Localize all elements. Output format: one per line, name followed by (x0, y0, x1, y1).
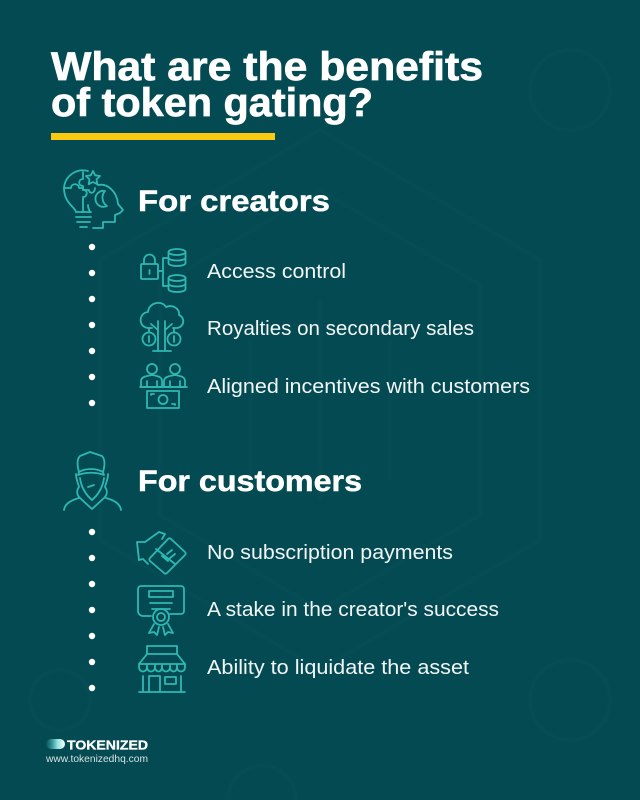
text: no subscription: No subscription payments (207, 542, 453, 564)
text: aligned incentives: Aligned incentives with customers (207, 376, 530, 398)
icon: person with cap (64, 452, 121, 510)
heading: for creators: For creators (138, 185, 330, 218)
icon: certificate (138, 586, 184, 635)
footer url: www.tokenizedhq.com (45, 753, 148, 765)
logo wordmark: TOKENIZED (67, 738, 148, 752)
icon: lightbulb puzzle head (64, 170, 123, 228)
footer logo (46, 738, 148, 752)
logo mark (46, 739, 65, 749)
panel: for customers (64, 452, 499, 692)
text: ability to liquidate: Ability to liquidate the asset (207, 657, 469, 679)
title: of token gating? (51, 81, 373, 125)
icon: lock and databases (141, 249, 186, 292)
panel: for creators (64, 170, 530, 408)
title (51, 45, 483, 125)
icon: money tree cloud (141, 303, 183, 351)
text: a stake: A stake in the creator's success (207, 599, 499, 621)
text: access control: Access control (207, 261, 346, 283)
timeline dots (89, 529, 95, 691)
title underline (51, 133, 275, 140)
timeline dots (89, 244, 95, 406)
text: royalties: Royalties on secondary sales (207, 318, 474, 340)
title: What are the benefits (51, 45, 483, 89)
heading: for customers: For customers (138, 465, 362, 498)
icon: people with money (140, 364, 187, 408)
icon: hand with card (137, 532, 186, 574)
icon: storefront (139, 646, 185, 692)
